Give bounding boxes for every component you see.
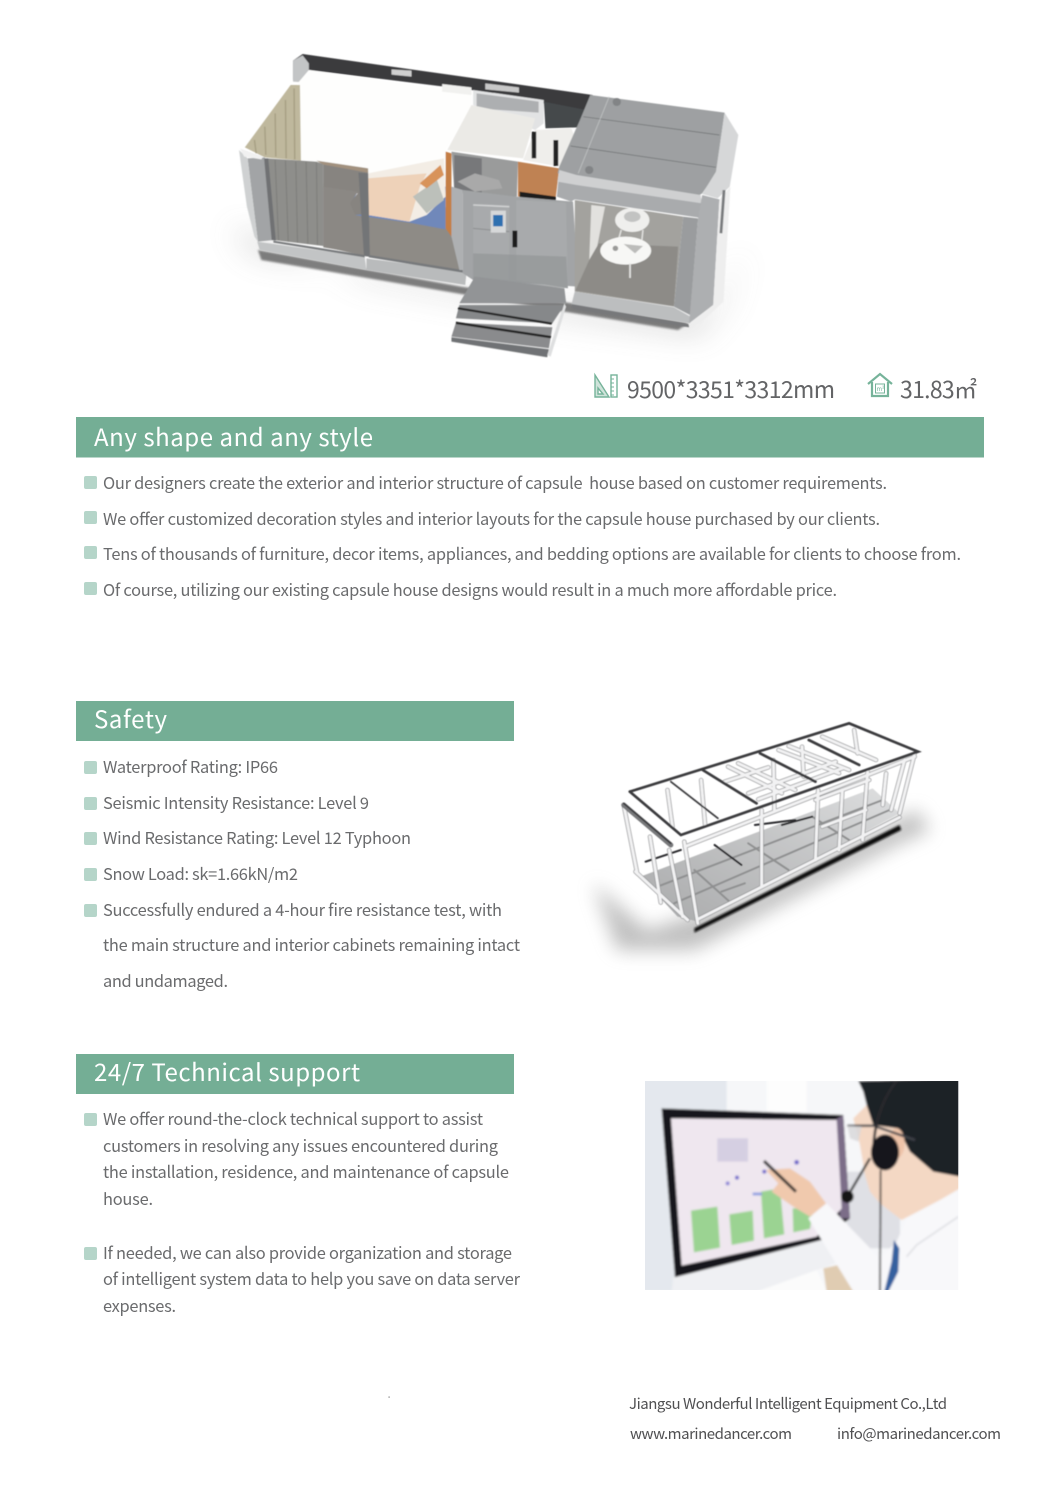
safety list: Successfully endured a 4-hour fire resistance test, with (103, 897, 502, 921)
bathroom panel (473, 90, 544, 130)
bullet list (84, 470, 961, 601)
footer: company contact: info@marinedancer.com (837, 1423, 1001, 1444)
safety list: the main structure and interior cabinets remaining intact (103, 932, 520, 956)
chair and table (615, 208, 649, 232)
left glass (266, 158, 323, 246)
heading: Any shape and any style (94, 418, 373, 453)
footer: company contact (629, 1393, 1001, 1444)
footer: company contact: www.marinedancer.com (630, 1423, 792, 1444)
safety list (84, 754, 520, 992)
bullet list: Tens of thousands of furniture, decor items, appliances, and bedding options are available for clients to choose from. (103, 541, 961, 565)
curtain (245, 85, 301, 161)
support text: If needed, we can also provide organization and storage (103, 1240, 512, 1264)
shirt (807, 1204, 900, 1290)
safety list: Wind Resistance Rating: Level 12 Typhoon (103, 825, 411, 849)
safety list: Seismic Intensity Resistance: Level 9 (103, 790, 369, 814)
support text: expenses. (103, 1293, 176, 1317)
support text (84, 1106, 521, 1317)
photo: technician with headset at monitor (643, 1078, 960, 1292)
interior glass and copper panels (446, 152, 451, 237)
roof (558, 95, 725, 197)
footer: company contact: Jiangsu Wonderful Intelligent Equipment Co.,Ltd (629, 1393, 947, 1414)
heading bar (76, 1054, 514, 1094)
hand and pen (766, 1168, 826, 1217)
bullet list: Our designers create the exterior and interior structure of capsule house based on customer requirements. (103, 470, 887, 494)
glasses (847, 1126, 915, 1140)
heading: Safety (94, 700, 167, 735)
floor (641, 788, 900, 922)
front fascia (557, 170, 704, 218)
support text: customers in resolving any issues encountered during (103, 1133, 498, 1157)
door (463, 190, 578, 287)
face and neck (853, 1105, 960, 1220)
heading: 24/7 Technical support (94, 1053, 360, 1088)
back wall strip (293, 54, 593, 112)
support text: the installation, residence, and maintenance of capsule (103, 1159, 509, 1183)
panel: technical support (76, 1053, 521, 1317)
white bedroom wall (297, 70, 471, 180)
safety list: and undamaged. (103, 968, 228, 992)
panel: safety (76, 700, 520, 992)
safety list: Waterproof Rating: IP66 (103, 754, 278, 778)
heading bar (76, 701, 514, 741)
right end cap (702, 113, 738, 198)
icon: house with area: m² (876, 384, 885, 393)
hair (858, 1078, 960, 1177)
support text: house. (103, 1186, 153, 1210)
white frame members (624, 730, 915, 923)
lounge room glass (575, 200, 683, 307)
steps (459, 277, 566, 303)
monitor (662, 1108, 850, 1278)
area text: 31.83㎡ (900, 371, 977, 405)
illustration: aluminium frame (593, 723, 930, 950)
safety list: Snow Load: sk=1.66kN/m2 (103, 861, 298, 885)
front tube (624, 805, 671, 845)
heading bar (76, 417, 984, 458)
support text: We offer round-the-clock technical support to assist (103, 1106, 483, 1130)
headset (873, 1081, 897, 1155)
dimensions text: 9500*3351*3312mm (627, 371, 835, 405)
icon: set square and ruler (595, 375, 617, 397)
illustration: capsule house cutaway (230, 54, 747, 357)
floor behind (323, 183, 461, 271)
bullet list: Of course, utilizing our existing capsule house designs would result in a much more affordable price. (103, 577, 837, 601)
roof dark frame (630, 723, 918, 835)
left end cap (248, 157, 273, 242)
icon: house with area (868, 374, 892, 396)
bullet list: We offer customized decoration styles and interior layouts for the capsule house purchased by our clients. (103, 506, 880, 530)
small dot (388, 1396, 390, 1398)
support text: of intelligent system data to help you save on data server (103, 1266, 521, 1290)
panel: any shape and any style (76, 417, 984, 601)
bed (349, 187, 446, 229)
